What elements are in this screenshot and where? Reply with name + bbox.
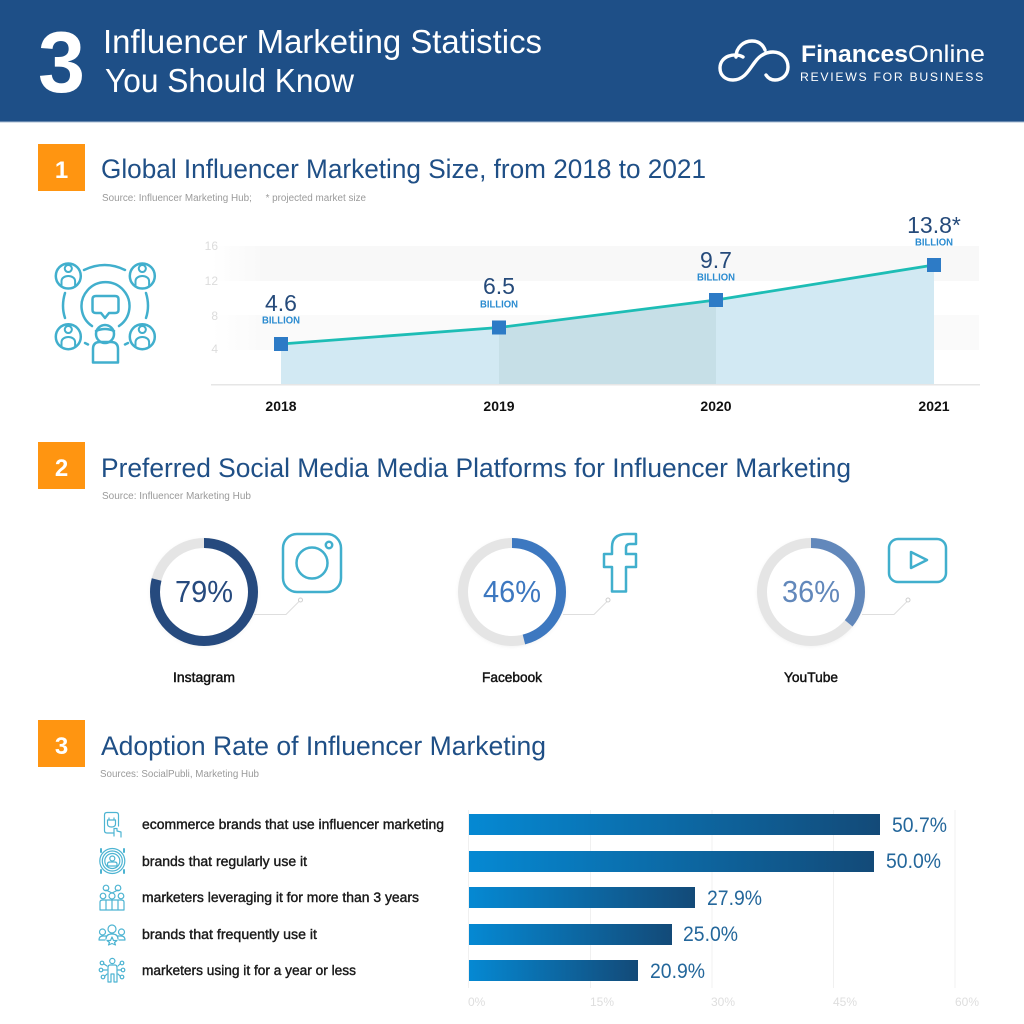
y axis labels: 8: [211, 309, 218, 323]
connector: YouTube: [862, 598, 910, 614]
value 2018: 4.6: [265, 290, 297, 316]
section 3 heading: Adoption Rate of Influencer Marketing: [101, 731, 546, 761]
x axis ticks: 60%: [955, 995, 979, 1009]
donut: YouTube: 36%: [782, 574, 840, 609]
section 1 badge: [38, 144, 85, 191]
section 2 heading: Preferred Social Media Media Platforms for Influencer Marketing: [101, 453, 851, 483]
donut: YouTube: YouTube: [784, 669, 838, 685]
donut: Instagram: [152, 541, 256, 685]
section 3 badge: [38, 720, 85, 767]
bar values: [650, 814, 947, 983]
icon: Facebook: [604, 534, 636, 592]
chart bands: [212, 246, 979, 350]
data markers: [274, 258, 941, 351]
header banner: [0, 0, 1024, 122]
x axis ticks: [468, 995, 979, 1009]
bar values: 25.0%: [683, 923, 738, 946]
x axis ticks: 0%: [468, 995, 486, 1009]
donut: Instagram: Instagram: [173, 669, 235, 685]
row labels: ecommerce brands that use influencer marketing: [142, 817, 444, 832]
donut: Facebook: Facebook: [482, 669, 543, 685]
bar values: 50.7%: [892, 814, 947, 837]
value 2020: BILLION: [697, 272, 735, 284]
value 2020: 9.7: [700, 247, 732, 273]
row icon: phone: [104, 812, 121, 837]
bar chart: adoption rate: [468, 810, 979, 1009]
value 2019: 6.5: [483, 273, 515, 299]
bar values: 50.0%: [886, 850, 941, 873]
bars: [469, 814, 880, 981]
value 2021: 13.8*: [907, 212, 961, 238]
x axis ticks: 30%: [711, 995, 735, 1009]
x axis years: 2020: [700, 398, 732, 414]
header number: 3: [38, 15, 85, 111]
bar values: 27.9%: [707, 887, 762, 910]
section 3 source: Sources: SocialPubli, Marketing Hub: [100, 769, 259, 780]
x axis years: [265, 398, 950, 414]
x axis ticks: 15%: [590, 995, 614, 1009]
row icon: group with star: [99, 925, 125, 945]
section 2 badge: [38, 442, 85, 489]
section 2 source: Source: Influencer Marketing Hub: [102, 491, 251, 502]
y axis labels: 4: [211, 342, 218, 356]
trend line: [281, 265, 934, 344]
y axis labels: [205, 239, 218, 356]
logo: FinancesOnline: Online: [908, 41, 985, 68]
value 2020: [697, 247, 735, 284]
donut: Instagram: 79%: [175, 574, 233, 609]
icon: influencer network: [56, 264, 155, 362]
connector: Facebook: [563, 598, 610, 614]
section 2 badge: 2: [55, 455, 68, 482]
line chart: market size: [205, 212, 980, 414]
y axis labels: 16: [205, 239, 218, 253]
value 2018: [262, 290, 300, 326]
icon: YouTube: [889, 539, 946, 582]
icon: Instagram: [283, 534, 341, 592]
x axis ticks: 45%: [833, 995, 857, 1009]
bar values: 20.9%: [650, 960, 705, 983]
connector: Instagram: [254, 598, 302, 614]
section 3 badge: 3: [55, 733, 68, 760]
x axis years: 2018: [265, 398, 297, 414]
y axis labels: 12: [205, 274, 218, 288]
row labels: [142, 817, 444, 978]
value 2018: BILLION: [262, 316, 300, 326]
area fill: [281, 265, 934, 384]
row labels: brands that regularly use it: [142, 854, 307, 869]
row labels: marketers using it for a year or less: [142, 963, 356, 978]
section 1 heading: Global Influencer Marketing Size, from 2018 to 2021: [101, 154, 706, 184]
row labels: marketers leveraging it for more than 3 years: [142, 890, 419, 905]
logo: FinancesOnline: Finances: [801, 41, 908, 68]
row icon: networked marketer: [99, 958, 125, 982]
row icon: target person: [100, 848, 125, 874]
value 2019: BILLION: [480, 300, 518, 310]
row icon: group of marketers: [100, 885, 124, 910]
donut: Facebook: [460, 541, 564, 685]
logo: FinancesOnline: [720, 41, 985, 84]
header title: You Should Know: [105, 62, 354, 99]
row labels: brands that frequently use it: [142, 927, 317, 942]
donut: YouTube: [759, 541, 863, 685]
value 2021: BILLION: [915, 238, 953, 248]
x axis years: 2019: [483, 398, 515, 414]
section 1 badge: 1: [55, 157, 68, 184]
section 1 source: Source: Influencer Marketing Hub; * projected market size: [102, 193, 366, 204]
header title: Influencer Marketing Statistics: [103, 23, 542, 60]
header title: [103, 23, 542, 99]
donut: Facebook: 46%: [483, 574, 541, 609]
x axis years: 2021: [918, 398, 950, 414]
value 2019: [480, 273, 518, 310]
logo: FinancesOnline: REVIEWS FOR BUSINESS: [800, 72, 985, 84]
